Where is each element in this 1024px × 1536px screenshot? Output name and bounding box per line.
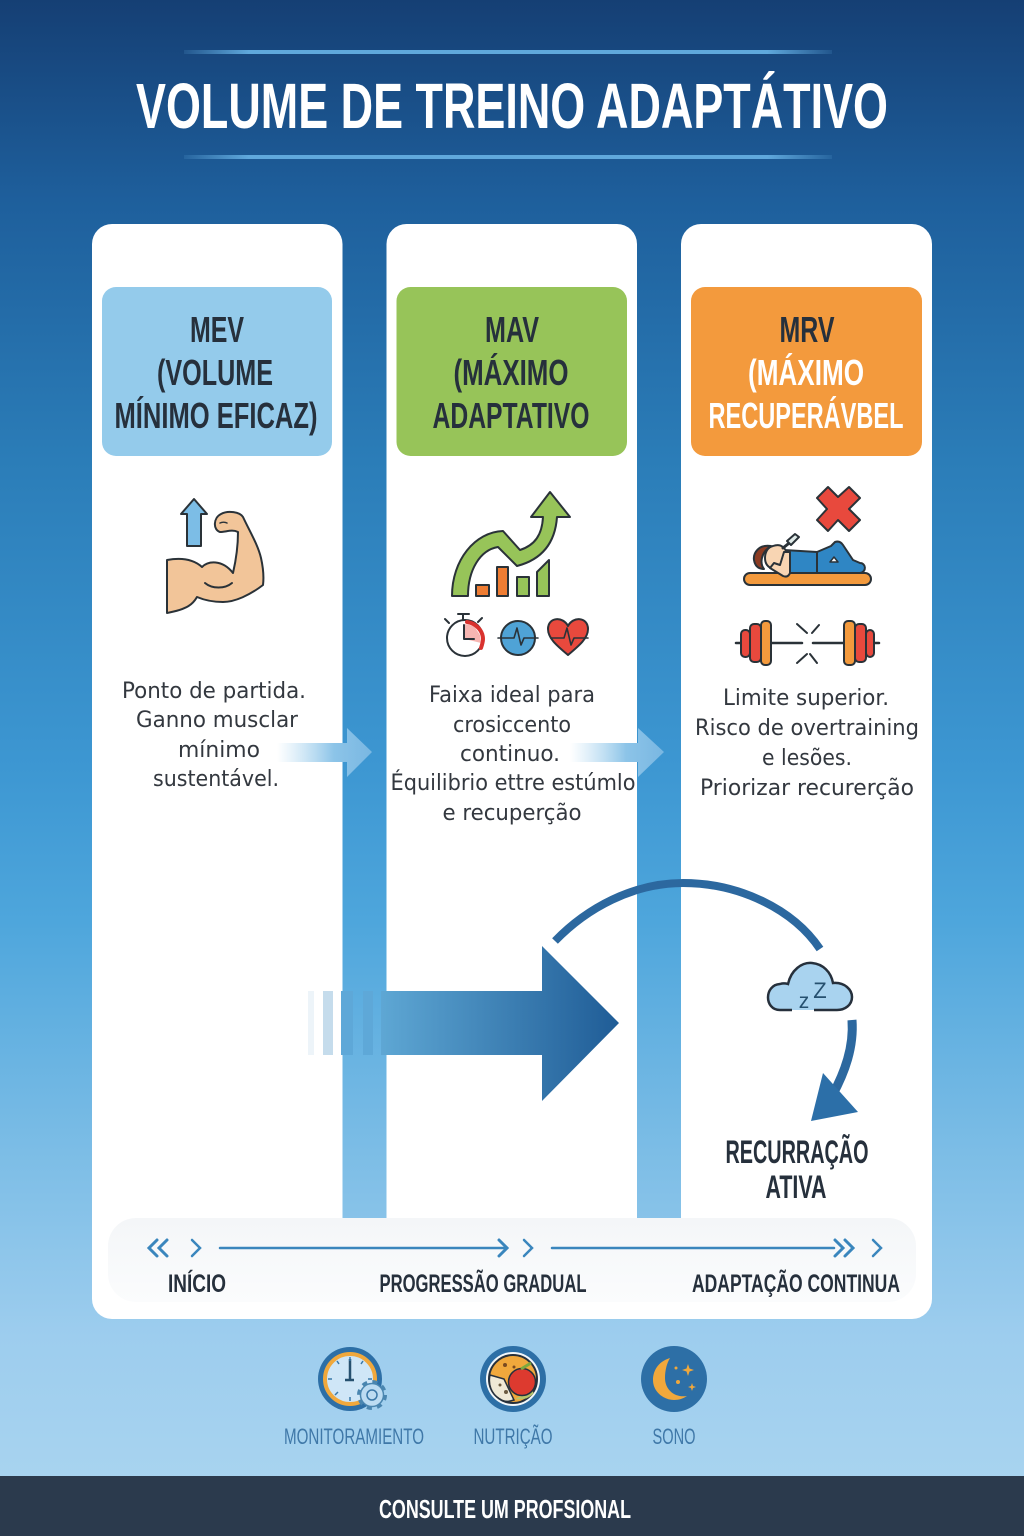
text: active recovery: RECURRAÇÃO xyxy=(726,1134,868,1170)
icon: sleep cloud: Z xyxy=(813,978,827,1003)
text: MRV description: Risco de overtraining xyxy=(695,716,919,741)
panel: MAV header xyxy=(396,287,627,456)
panel: timeline: ADAPTAÇÃO CONTINUA xyxy=(692,1268,900,1298)
text: active recovery: ATIVA xyxy=(766,1169,826,1205)
text: MRV description xyxy=(695,686,919,801)
text: MAV description: Faixa ideal para xyxy=(429,683,595,708)
panel: MEV header: MEV xyxy=(190,309,244,350)
icon: growth chart with stopwatch, pulse and heart xyxy=(445,492,588,656)
footer xyxy=(0,1476,1024,1536)
text: MEV description: Ganno musclar xyxy=(136,708,299,733)
text: nutrition label: NUTRIÇÃO xyxy=(474,1424,552,1449)
panel: MEV header xyxy=(102,287,332,456)
arrow: big progression arrow xyxy=(308,946,619,1101)
arrow: recovery cycle arc xyxy=(555,883,858,1121)
panel: MEV header: MÍNIMO EFICAZ) xyxy=(114,395,318,436)
icon: sleep moon xyxy=(641,1346,707,1412)
icon: monitoring clock xyxy=(318,1347,385,1411)
arrow: MAV to MRV xyxy=(570,728,664,777)
footer: CONSULTE UM PROFSIONAL xyxy=(379,1494,631,1524)
text: MAV description xyxy=(390,683,636,826)
icon: resting person with red cross and barbell xyxy=(736,487,879,665)
icon: sleep cloud xyxy=(768,963,852,1013)
panel: MAV header: (MÁXIMO xyxy=(454,352,568,393)
text: MAV description: crosiccento xyxy=(453,713,571,738)
text: MRV description: Priorizar recurerção xyxy=(700,776,914,801)
text: MEV description: sustentável. xyxy=(153,767,279,792)
panel: timeline: PROGRESSÃO GRADUAL xyxy=(380,1268,586,1298)
text: sleep label: SONO xyxy=(652,1424,696,1449)
text: monitoring label: MONITORAMIENTO xyxy=(284,1424,424,1449)
panel: main white card xyxy=(92,224,932,1319)
panel: MRV header: RECUPERÁVBEL xyxy=(708,395,904,436)
icon: flexed arm with up arrow xyxy=(167,499,263,613)
text: MRV description: Limite superior. xyxy=(723,686,889,711)
panel: MEV header: (VOLUME xyxy=(157,352,273,393)
panel: MRV header: (MÁXIMO xyxy=(748,352,864,393)
icon: nutrition plate xyxy=(480,1346,546,1412)
text: active recovery xyxy=(726,1134,868,1205)
panel: MRV header: MRV xyxy=(780,309,834,350)
text: MAV description: e recuperção xyxy=(442,801,582,826)
arrow: MEV to MAV xyxy=(277,728,372,777)
icon: sleep cloud: z xyxy=(799,990,809,1013)
panel: timeline xyxy=(108,1218,916,1302)
timeline arrows xyxy=(149,1240,881,1256)
panel: timeline: INÍCIO xyxy=(168,1269,226,1298)
text: MAV description: Équilibrio ettre estúmlo xyxy=(390,770,636,796)
panel: MRV header xyxy=(691,287,922,456)
text: MAV description: continuo. xyxy=(460,742,560,767)
text: MEV description xyxy=(122,679,306,792)
text: MEV description: mínimo xyxy=(178,738,260,763)
panel: MAV header: MAV xyxy=(485,309,539,350)
panel: MAV header: ADAPTATIVO xyxy=(432,395,590,436)
text: MRV description: e lesões. xyxy=(762,746,852,771)
text: MEV description: Ponto de partida. xyxy=(122,679,306,704)
